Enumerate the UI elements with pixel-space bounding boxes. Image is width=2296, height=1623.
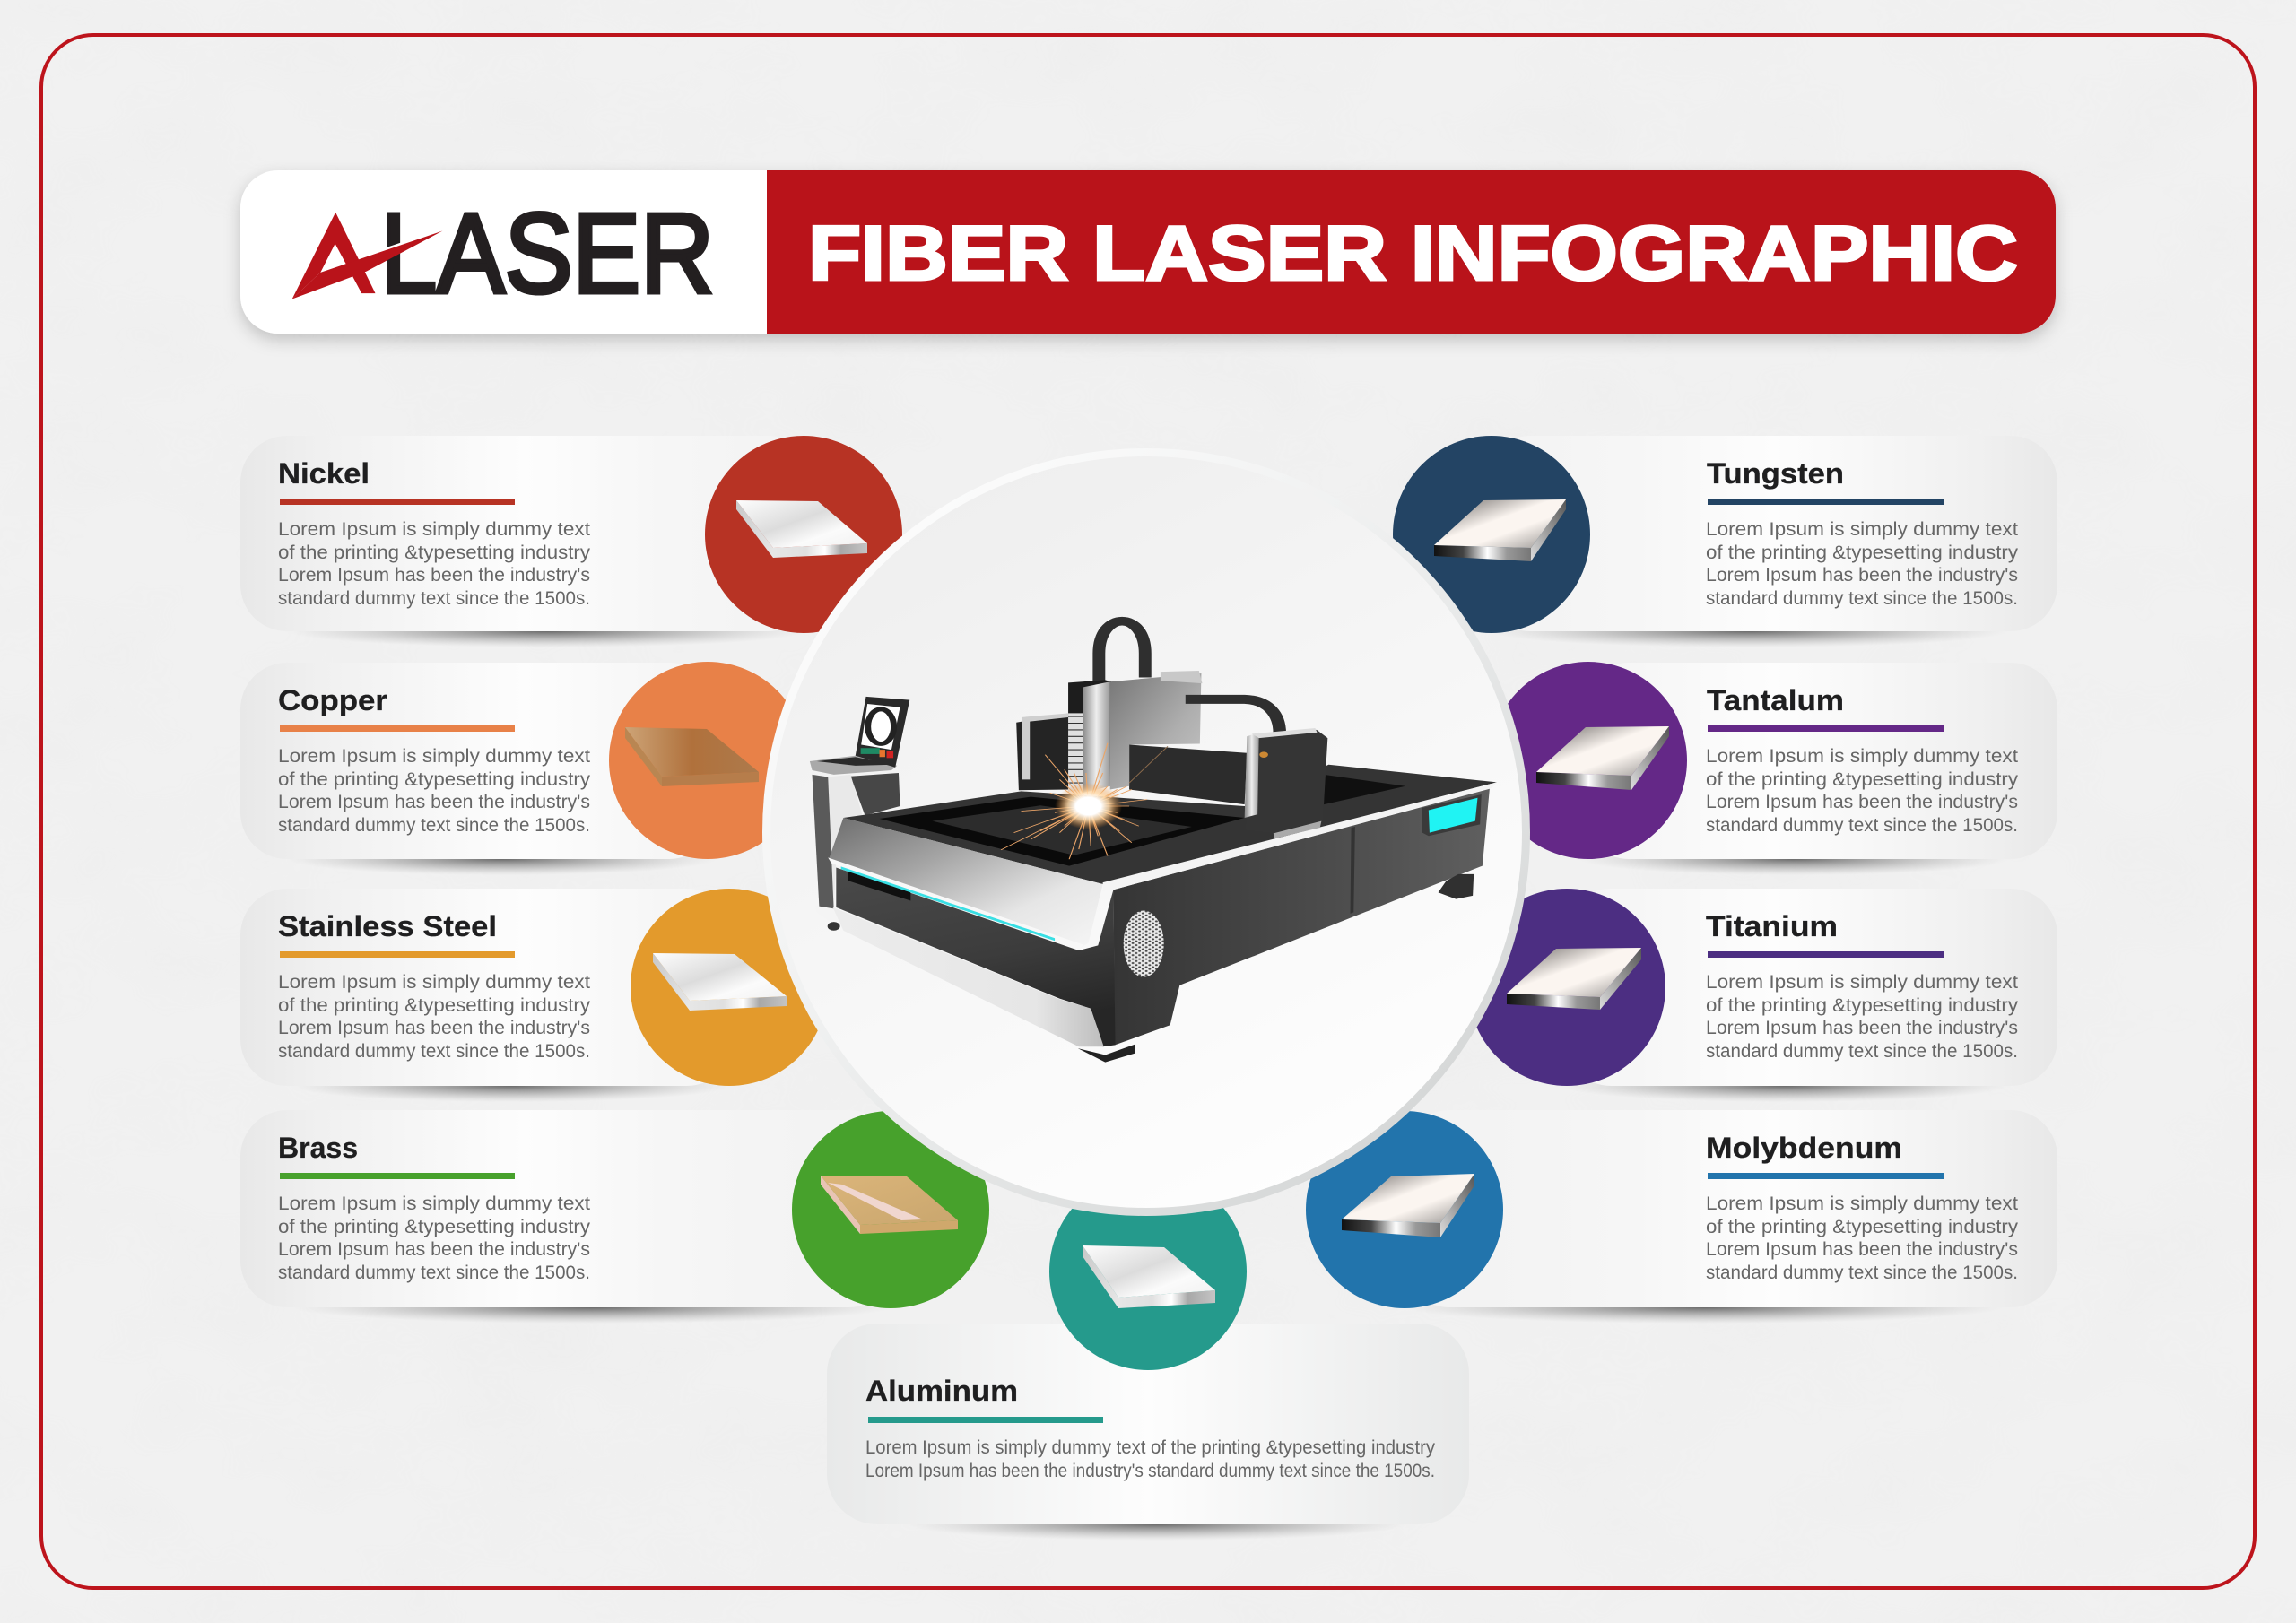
cyan side display (1422, 794, 1482, 836)
table top (843, 765, 1497, 884)
body text: Lorem Ipsum has been the industry's (278, 1017, 590, 1038)
icon: aluminum plate (1083, 1245, 1215, 1308)
left gantry box (1016, 713, 1069, 790)
icon: molybdenum plate (1342, 1174, 1474, 1237)
body text (1706, 1193, 2018, 1283)
body text: of the printing &typesetting industry (1706, 994, 2018, 1016)
right gantry box (1245, 728, 1327, 838)
underline (280, 725, 515, 732)
white top edge (1103, 782, 1497, 890)
metal sheet (932, 805, 1192, 855)
body text (278, 971, 590, 1062)
logo: A LASER: LASER (380, 190, 714, 317)
side panel divider (1351, 827, 1355, 914)
heading: Molybdenum: Molybdenum (1706, 1132, 1902, 1164)
header banner (240, 170, 2056, 334)
panel: Tantalum (1578, 663, 2057, 875)
body text: of the printing &typesetting industry (1706, 542, 2018, 563)
front foot (1078, 1045, 1135, 1063)
body text: of the printing &typesetting industry (278, 1216, 590, 1237)
underline (868, 1417, 1103, 1423)
underline (280, 951, 515, 958)
heading: Tungsten: Tungsten (1707, 457, 1844, 490)
colored circle: Copper (609, 662, 806, 859)
body text: Lorem Ipsum is simply dummy text (278, 1193, 590, 1214)
body text: Lorem Ipsum has been the industry's (278, 791, 590, 812)
body text: of the printing &typesetting industry (1706, 1216, 2018, 1237)
icon: copper plate (625, 727, 759, 786)
heading: Nickel: Nickel (278, 457, 370, 490)
header red title bar (767, 170, 2056, 334)
body text: Lorem Ipsum is simply dummy text (1706, 745, 2018, 767)
colored circle: Molybdenum (1306, 1111, 1503, 1308)
body text: Lorem Ipsum is simply dummy text (1706, 1193, 2018, 1214)
body text: standard dummy text since the 1500s. (278, 587, 590, 609)
white and cyan trim (828, 857, 1083, 950)
body text: standard dummy text since the 1500s. (1706, 1040, 2018, 1062)
body text (1706, 745, 2018, 836)
body text: Lorem Ipsum has been the industry's (1706, 1238, 2018, 1260)
panel: Nickel (240, 436, 814, 647)
underline (280, 1173, 515, 1179)
heading: Stainless Steel: Stainless Steel (278, 910, 497, 942)
drawer (833, 907, 1104, 1046)
colored circle: Tantalum (1490, 662, 1687, 859)
heading: Titanium: Titanium (1706, 910, 1838, 942)
icon: tantalum plate (1536, 726, 1669, 790)
body text: Lorem Ipsum has been the industry's (1706, 791, 2018, 812)
right cable (1186, 699, 1280, 733)
panel: Aluminum (827, 1324, 1469, 1541)
laser cutting machine (810, 621, 1497, 1063)
body text: Lorem Ipsum has been the industry's standard dummy text since the 1500s. (865, 1460, 1435, 1481)
body text: Lorem Ipsum has been the industry's (278, 1238, 590, 1260)
cable arch (1099, 621, 1145, 681)
body text: standard dummy text since the 1500s. (1706, 814, 2018, 836)
header white logo plate (240, 170, 2056, 334)
body text: of the printing &typesetting industry (278, 994, 590, 1016)
body text (278, 745, 590, 836)
body text (1706, 518, 2018, 609)
colored circle: Titanium (1468, 889, 1665, 1086)
back foot (1439, 874, 1474, 899)
body text: Lorem Ipsum is simply dummy text (1706, 971, 2018, 993)
body text: Lorem Ipsum is simply dummy text of the printing &typesetting industry (865, 1436, 1435, 1458)
rail cover (1129, 745, 1247, 804)
laser head (1068, 671, 1203, 793)
panel: Brass (240, 1110, 895, 1324)
panel: Titanium (1561, 889, 2057, 1102)
body text: standard dummy text since the 1500s. (1706, 1262, 2018, 1283)
underline (1708, 951, 1944, 958)
underline (1708, 1173, 1944, 1179)
heading: Copper: Copper (278, 684, 387, 716)
heading: Brass: Brass (278, 1132, 358, 1164)
body text: Lorem Ipsum is simply dummy text (278, 745, 590, 767)
body text: of the printing &typesetting industry (278, 768, 590, 790)
back bed (1324, 775, 1405, 804)
side panel (1113, 789, 1490, 1045)
central circle with ring (762, 448, 1530, 1216)
body text: of the printing &typesetting industry (278, 542, 590, 563)
colored circle: Tungsten (1393, 436, 1590, 633)
body text (865, 1436, 1435, 1481)
body text (278, 1193, 590, 1283)
icon: brass plate (821, 1176, 958, 1234)
side vent (1124, 911, 1164, 977)
sparks (1001, 743, 1168, 859)
body text: Lorem Ipsum has been the industry's (278, 564, 590, 586)
front lower panel (836, 867, 1116, 1046)
underline (280, 499, 515, 505)
body text: Lorem Ipsum is simply dummy text (278, 518, 590, 540)
front slit (848, 871, 910, 900)
colored circle: Brass (792, 1111, 989, 1308)
front silver hood (829, 818, 1103, 949)
underline (1708, 725, 1944, 732)
body text: standard dummy text since the 1500s. (278, 1262, 590, 1283)
heading: Tantalum: Tantalum (1707, 684, 1844, 716)
body text: standard dummy text since the 1500s. (278, 1040, 590, 1062)
body text: Lorem Ipsum is simply dummy text (278, 971, 590, 993)
heading: Aluminum: Aluminum (865, 1375, 1018, 1407)
body text (278, 518, 590, 609)
panel: Molybdenum (1403, 1110, 2057, 1324)
left control stand (810, 697, 909, 931)
icon: titanium plate (1507, 948, 1641, 1010)
body text (1706, 971, 2018, 1062)
colored circle: Nickel (705, 436, 902, 633)
body text: Lorem Ipsum has been the industry's (1706, 1017, 2018, 1038)
body text: standard dummy text since the 1500s. (1706, 587, 2018, 609)
body text: of the printing &typesetting industry (1706, 768, 2018, 790)
icon: stainless steel plate (653, 953, 787, 1011)
icon: nickel plate (736, 500, 867, 558)
icon: tungsten plate (1434, 499, 1566, 561)
colored circle: Aluminum (1049, 1173, 1247, 1370)
colored circle: Stainless Steel (631, 889, 828, 1086)
bed (880, 797, 1245, 866)
body text: Lorem Ipsum has been the industry's (1706, 564, 2018, 586)
body text: standard dummy text since the 1500s. (278, 814, 590, 836)
underline (1708, 499, 1944, 505)
panel: Tungsten (1483, 436, 2057, 647)
panel: Copper (240, 663, 718, 875)
title: FIBER LASER INFOGRAPHIC (808, 211, 2018, 297)
panel: Stainless Steel (240, 889, 734, 1102)
body text: Lorem Ipsum is simply dummy text (1706, 518, 2018, 540)
head fins (1068, 716, 1083, 783)
